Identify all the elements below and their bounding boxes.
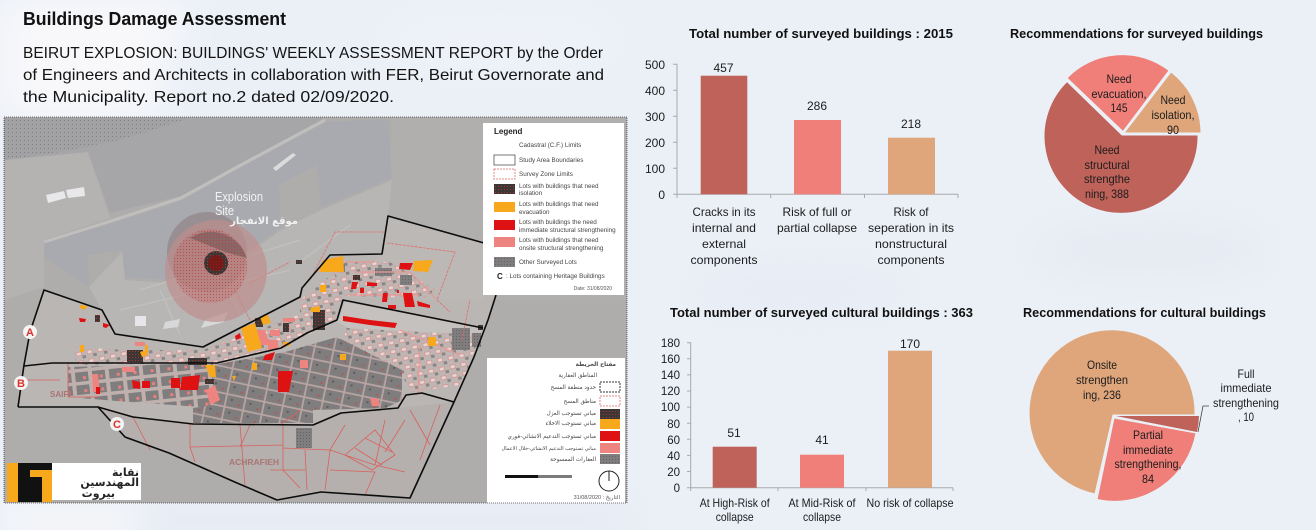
legend: English: immediate structural strengthening [519, 227, 616, 234]
legend: English: Date: 31/08/2020 [574, 286, 612, 292]
harbour basin [44, 119, 392, 287]
bar chart: cultural buildings: No risk of collapse [866, 496, 954, 510]
bar chart: cultural buildings: collapse [716, 510, 754, 524]
bar chart: surveyed buildings: 100 [645, 162, 665, 176]
report description: BEIRUT EXPLOSION: BUILDINGS' WEEKLY ASSESSMENT REPORT by the Order [23, 45, 604, 62]
legend: Arabic: مباني تستوجب التدعيم الانشائي-فوري [507, 434, 596, 440]
bar chart: cultural buildings: 51 [727, 426, 741, 440]
bar chart: surveyed buildings: 200 [645, 136, 665, 150]
map frame [4, 117, 627, 503]
bar chart: surveyed buildings [645, 58, 958, 267]
pie chart: surveyed recommendations: ning, 388 [1085, 187, 1129, 201]
heading: surveyed buildings chart: Total number of surveyed buildings : 2015 [689, 26, 953, 41]
bar chart: cultural buildings: 170 [900, 337, 920, 351]
report description: the Municipality. Report no.2 dated 02/09/2020. [23, 89, 394, 106]
bar chart: surveyed buildings: 286 [807, 99, 827, 113]
logo [7, 463, 141, 502]
legend: English: Lots with buildings that need [519, 201, 599, 208]
legend: Arabic: المناطق العقارية [558, 373, 597, 379]
bar chart: surveyed buildings: 400 [645, 84, 665, 98]
legend: English: Legend [494, 127, 523, 136]
legend: English: isolation [519, 190, 543, 197]
bar chart: surveyed buildings: seperation in its [868, 221, 954, 235]
legend: English: C [497, 272, 503, 281]
legend: Arabic: 31/08/2020 : التاريخ [574, 495, 620, 501]
pie chart: cultural recommendations: immediate [1123, 443, 1173, 457]
study area boundaries [18, 216, 496, 500]
pie chart: surveyed recommendations: strengthe [1084, 172, 1130, 186]
district labels: SAIFI [50, 390, 70, 399]
heading: cultural recommendations: Recommendations for cultural buildings [1023, 305, 1266, 320]
legend: Arabic: العقارات الممسوحة [550, 457, 596, 463]
bar chart: surveyed buildings: partial collapse [777, 221, 857, 235]
zone markers: C [113, 419, 121, 431]
logo: نقابة [112, 466, 139, 479]
bar chart: cultural buildings: 120 [661, 386, 680, 398]
leader line [1198, 406, 1209, 432]
legend: Arabic: مناطق المسح [564, 399, 596, 405]
report description: of Engineers and Architects in collaboration with FER, Beirut Governorate and [23, 67, 604, 84]
logo: بيروت [82, 487, 115, 500]
pie chart: surveyed recommendations: 145 [1110, 101, 1128, 115]
bar chart: cultural buildings: At Mid-Risk of [788, 496, 856, 510]
bar chart: cultural buildings: 180 [661, 338, 680, 350]
explosion site label: Explosion [215, 190, 263, 204]
bar chart: cultural buildings: 80 [667, 419, 680, 431]
zone markers: A [26, 327, 34, 339]
report description [23, 45, 604, 106]
bar chart: cultural buildings [661, 337, 954, 524]
pink lots [92, 316, 380, 406]
bar chart: surveyed buildings: 500 [645, 58, 665, 72]
bar chart: cultural buildings: 0 [674, 483, 680, 495]
bar chart: cultural buildings: 140 [661, 370, 680, 382]
pie chart: cultural recommendations: strengthening, [1114, 457, 1182, 471]
bar chart: cultural buildings: 60 [667, 435, 680, 447]
legend: English: Study Area Boundaries [519, 157, 583, 164]
stippled sea corner [4, 118, 190, 160]
bar chart: surveyed buildings: 0 [658, 188, 665, 202]
pie chart: surveyed recommendations: Need [1106, 72, 1132, 86]
bar chart: surveyed buildings: components [690, 253, 758, 267]
pie chart: cultural recommendations: immediate [1220, 381, 1272, 395]
explosion site label: موقع الانفجار [229, 216, 298, 227]
pie chart: surveyed recommendations: isolation, [1152, 108, 1194, 122]
heading: cultural buildings chart: Total number of surveyed cultural buildings : 363 [670, 305, 973, 320]
explosion site rings [165, 212, 267, 322]
legend: Arabic: مباني تستوجب الاخلاء [546, 421, 596, 427]
legend: Arabic: مباني تستوجب التدعيم الانشائي-خلال الاعمال [502, 446, 596, 452]
port details [44, 120, 325, 329]
surveyed lots [68, 363, 215, 408]
bar chart: surveyed buildings: 218 [901, 117, 921, 131]
legend: Arabic: مفتاح الخريطة [576, 362, 617, 368]
heading: surveyed recommendations: Recommendations for surveyed buildings [1010, 26, 1263, 41]
legend: English: Other Surveyed Lots [519, 259, 577, 266]
bar chart: cultural buildings: 41 [815, 433, 829, 447]
pie chart: cultural recommendations [1029, 330, 1279, 501]
bar chart: surveyed buildings: 300 [645, 110, 665, 124]
pie chart: surveyed recommendations: evacuation, [1092, 87, 1146, 101]
bar chart: cultural buildings: 160 [661, 354, 680, 366]
bar chart: cultural buildings: At High-Risk of [700, 496, 770, 510]
land areas [4, 118, 627, 347]
bar chart: surveyed buildings: nonstructural [875, 237, 947, 251]
pie chart: surveyed recommendations: structural [1084, 158, 1130, 172]
pie chart: cultural recommendations: Partial [1133, 428, 1163, 442]
orange evacuation lots [80, 256, 436, 381]
bar chart: surveyed buildings: Risk of full or [782, 205, 852, 219]
pie chart: cultural recommendations: Onsite [1087, 358, 1117, 372]
red strengthening lots [79, 263, 430, 394]
open sea [4, 118, 325, 213]
legend: English: Survey Zone Limits [519, 171, 573, 178]
legend: English: onsite structural strengthening [519, 245, 604, 252]
logo: المهندسين [80, 476, 139, 489]
district labels: ACHRAFIEH [229, 458, 279, 467]
legend: English: evacuation [519, 209, 550, 216]
legend: Arabic: حدود منطقة المسح [551, 385, 597, 391]
pie chart: surveyed recommendations: Need [1160, 93, 1186, 107]
legend: Arabic: مباني تستوجب العزل [547, 411, 596, 417]
bar chart: surveyed buildings: external [702, 237, 746, 251]
legend: English: : Lots containing Heritage Buildings [506, 273, 605, 280]
bar chart: surveyed buildings: internal and [692, 221, 756, 235]
district labels [50, 390, 279, 467]
study area zones [18, 216, 497, 500]
legend: English: Lots with buildings the need [519, 219, 597, 226]
map panel [4, 117, 627, 503]
legend: Arabic [487, 358, 625, 503]
bar chart: cultural buildings: 100 [661, 402, 680, 414]
pie chart: surveyed recommendations [1044, 55, 1201, 213]
explosion site label: Site [215, 204, 234, 218]
speckled low-rise lots [75, 262, 480, 392]
bar chart: cultural buildings: 20 [667, 467, 680, 479]
pie chart: cultural recommendations: 84 [1142, 472, 1154, 486]
bar chart: surveyed buildings: Cracks in its [692, 205, 756, 219]
bar chart: surveyed buildings: Risk of [894, 205, 929, 219]
pie chart: cultural recommendations: Full [1238, 367, 1254, 381]
pie chart: cultural recommendations: , 10 [1238, 410, 1254, 424]
legend: English: Lots with buildings that need [519, 183, 599, 190]
pie chart: cultural recommendations: strengthening [1213, 396, 1279, 410]
zone markers [14, 325, 124, 431]
title: Buildings Damage Assessment [23, 9, 286, 29]
explosion site label [215, 190, 298, 227]
legend: English [483, 123, 624, 295]
bar chart: surveyed buildings: components [878, 253, 944, 267]
cadastral and survey limits [20, 362, 440, 495]
pie chart: surveyed recommendations: 90 [1167, 123, 1179, 137]
black stipple lots [95, 260, 483, 384]
legend: English: Lots with buildings that need [519, 237, 599, 244]
bar chart: cultural buildings: 40 [667, 451, 680, 463]
pie chart: surveyed recommendations: Need [1094, 143, 1120, 157]
pie chart: cultural recommendations: strengthen [1076, 373, 1128, 387]
legend: English: Cadastral (C.F.) Limits [519, 142, 581, 149]
bar chart: cultural buildings: collapse [803, 510, 841, 524]
zone markers: B [17, 378, 25, 390]
pie chart: cultural recommendations: ing, 236 [1083, 388, 1121, 402]
bar chart: surveyed buildings: 457 [713, 61, 734, 75]
